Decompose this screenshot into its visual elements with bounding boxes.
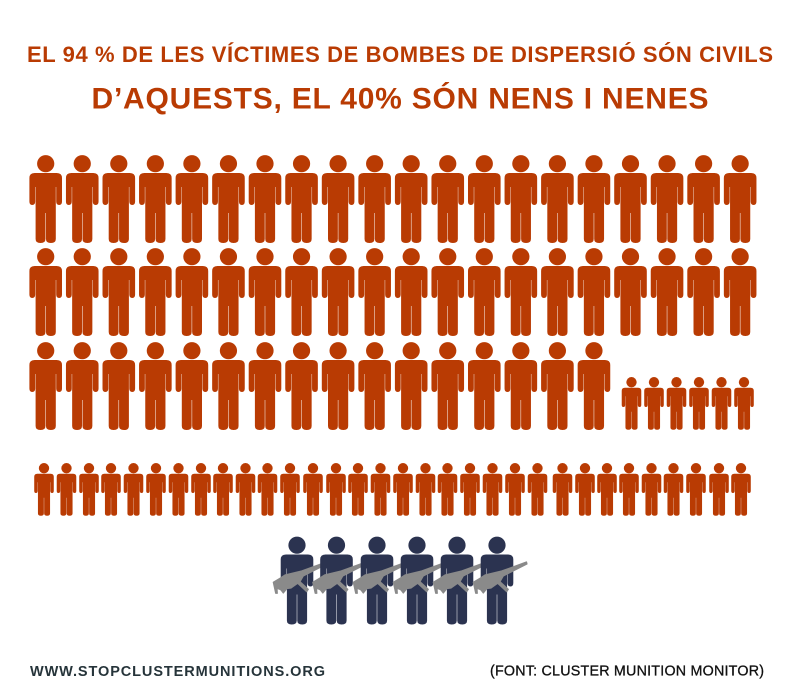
pictogram: civilian adults, row 1 [29, 155, 756, 243]
pictogram: armed combatants [273, 537, 527, 624]
footer: source: (FONT: CLUSTER MUNITION MONITOR) [490, 664, 764, 680]
footer: website: WWW.STOPCLUSTERMUNITIONS.ORG [30, 664, 325, 680]
pictogram: civilian adults, row 3 [29, 342, 610, 430]
title: line 2: D’AQUESTS, EL 40% SÓN NENS I NENES [92, 82, 708, 116]
title: line 1: EL 94 % DE LES VÍCTIMES DE BOMBES DE DISPERSIÓ SÓN CIVILS [27, 42, 773, 67]
pictogram: civilian adults, row 2 [29, 248, 756, 336]
pictogram: children, end of row 3 [622, 377, 754, 430]
pictogram: children, row 4 [34, 463, 751, 516]
